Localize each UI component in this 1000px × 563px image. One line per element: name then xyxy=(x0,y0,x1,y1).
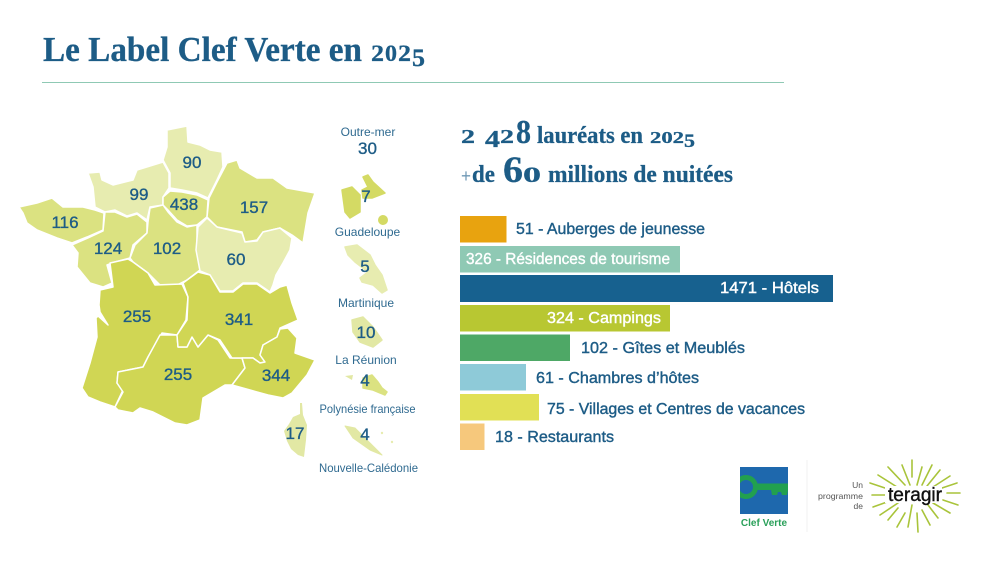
territory: Guadeloupe xyxy=(335,175,401,239)
bar: Auberges de jeunesse: 51 - Auberges de jeunesse xyxy=(516,221,705,238)
logo: Clef Verte xyxy=(740,467,788,526)
figure: nuitees: 0 xyxy=(523,162,541,187)
bar: Restaurants: 18 - Restaurants xyxy=(495,429,614,446)
region: Grand Est xyxy=(207,160,315,243)
key figures xyxy=(461,114,733,191)
figure: nuitees: + xyxy=(461,166,471,186)
bar: Villages et Centres de vacances xyxy=(460,394,805,420)
region values: 60 xyxy=(227,250,245,269)
bar: Auberges de jeunesse xyxy=(460,216,705,242)
figure: laureats: 5 xyxy=(684,131,695,152)
bar: Campings xyxy=(460,305,670,332)
figure: laureats: 2 xyxy=(500,126,514,148)
region: Ile-de-France xyxy=(163,191,208,226)
region values: 344 xyxy=(262,366,290,385)
region: Centre-Val de Loire xyxy=(130,205,200,285)
wordmark: teragir: teragir xyxy=(888,485,943,506)
title: 5 xyxy=(412,45,425,72)
bar: Campings: 324 - Campings xyxy=(547,310,661,327)
title: 0 xyxy=(385,41,397,66)
region: Auvergne-Rhone-Alpes xyxy=(177,272,298,363)
logo: teragir xyxy=(818,460,960,532)
region: PACA xyxy=(232,328,315,398)
figure: nuitees: 6 xyxy=(503,150,523,191)
region values: 124 xyxy=(94,239,122,258)
heading: Outre-mer xyxy=(341,125,395,158)
region values: 17 xyxy=(286,424,304,443)
figure: laureats: 202 xyxy=(650,128,684,147)
region: Hauts-de-France xyxy=(163,126,223,198)
figure: nuitees xyxy=(461,150,733,191)
bar chart xyxy=(460,216,833,450)
territory: La Reunion: La Réunion xyxy=(335,353,397,367)
figure: laureats: 4 xyxy=(485,127,500,153)
region: Normandie xyxy=(88,162,169,220)
territory: Martinique: Martinique xyxy=(338,296,394,310)
title: Le Label Clef Verte en xyxy=(43,30,362,69)
territory: Polynesie francaise xyxy=(320,371,416,416)
logo: Clef Verte: Clef Verte xyxy=(741,518,788,529)
territory: La Reunion: 10 xyxy=(357,323,375,342)
region values: 90 xyxy=(183,153,201,172)
bar: Villages et Centres de vacances: 75 - Villages et Centres de vacances xyxy=(547,401,805,418)
region values: 341 xyxy=(225,310,253,329)
territory: Martinique xyxy=(338,245,394,310)
caption: Un programme de: de xyxy=(854,501,863,511)
region values: 99 xyxy=(130,185,148,204)
territory: Martinique: 5 xyxy=(360,257,370,276)
figure: nuitees: millions de nuitées xyxy=(548,162,733,188)
caption: Un programme de: Un xyxy=(852,480,863,490)
region values: 116 xyxy=(51,213,79,232)
region values: 157 xyxy=(240,198,268,217)
region values: 255 xyxy=(164,365,192,384)
territory: Nouvelle-Caledonie: 4 xyxy=(360,425,370,444)
region values: 438 xyxy=(170,195,198,214)
bar: Residences de tourisme: 326 - Résidences de tourisme xyxy=(466,251,670,268)
region: Pays de la Loire xyxy=(72,212,147,287)
map of France xyxy=(19,126,315,457)
figure: laureats: 2 xyxy=(461,126,475,148)
territory: Polynesie francaise: Polynésie française xyxy=(320,402,416,416)
caption: Un programme de xyxy=(818,480,863,511)
title: 2 xyxy=(398,41,411,66)
bar: Gites et Meubles: 102 - Gîtes et Meublés xyxy=(581,340,745,357)
caption: Un programme de: programme xyxy=(818,491,863,501)
heading: Outre-mer: Outre-mer xyxy=(341,125,395,139)
overseas territories xyxy=(319,125,418,475)
figure: nuitees: de xyxy=(472,162,495,188)
territory: Guadeloupe: 7 xyxy=(361,187,371,206)
bar: Chambres d'hotes xyxy=(460,364,699,390)
region: Bretagne xyxy=(19,198,104,243)
region: Nouvelle-Aquitaine xyxy=(82,259,188,407)
region values: 102 xyxy=(153,239,181,258)
bar: Hotels xyxy=(460,275,833,302)
territory: Nouvelle-Caledonie: Nouvelle-Calédonie xyxy=(319,461,418,475)
figure: laureats: lauréats en xyxy=(537,123,643,149)
territory: Polynesie francaise: 4 xyxy=(360,371,370,390)
territory: Guadeloupe: Guadeloupe xyxy=(335,225,401,239)
territory: Nouvelle-Caledonie xyxy=(319,425,418,475)
bar: Restaurants xyxy=(460,424,614,450)
region: Bourgogne-Franche-Comte xyxy=(196,218,292,292)
bar: Gites et Meubles xyxy=(460,334,745,361)
bar: Chambres d'hotes: 61 - Chambres d’hôtes xyxy=(536,370,699,387)
icon: sun rays xyxy=(870,460,960,532)
heading: Outre-mer: 30 xyxy=(358,139,377,158)
bar: Hotels: 1471 - Hôtels xyxy=(720,280,819,297)
figure: laureats: 8 xyxy=(516,114,531,151)
region values: 255 xyxy=(123,307,151,326)
region: Corse xyxy=(284,403,307,457)
region: Occitanie xyxy=(115,335,245,425)
region values xyxy=(51,153,304,443)
bar: Residences de tourisme xyxy=(460,246,680,272)
figure: laureats xyxy=(461,114,695,153)
title: 2 xyxy=(371,41,384,66)
territory: La Reunion xyxy=(335,317,397,367)
